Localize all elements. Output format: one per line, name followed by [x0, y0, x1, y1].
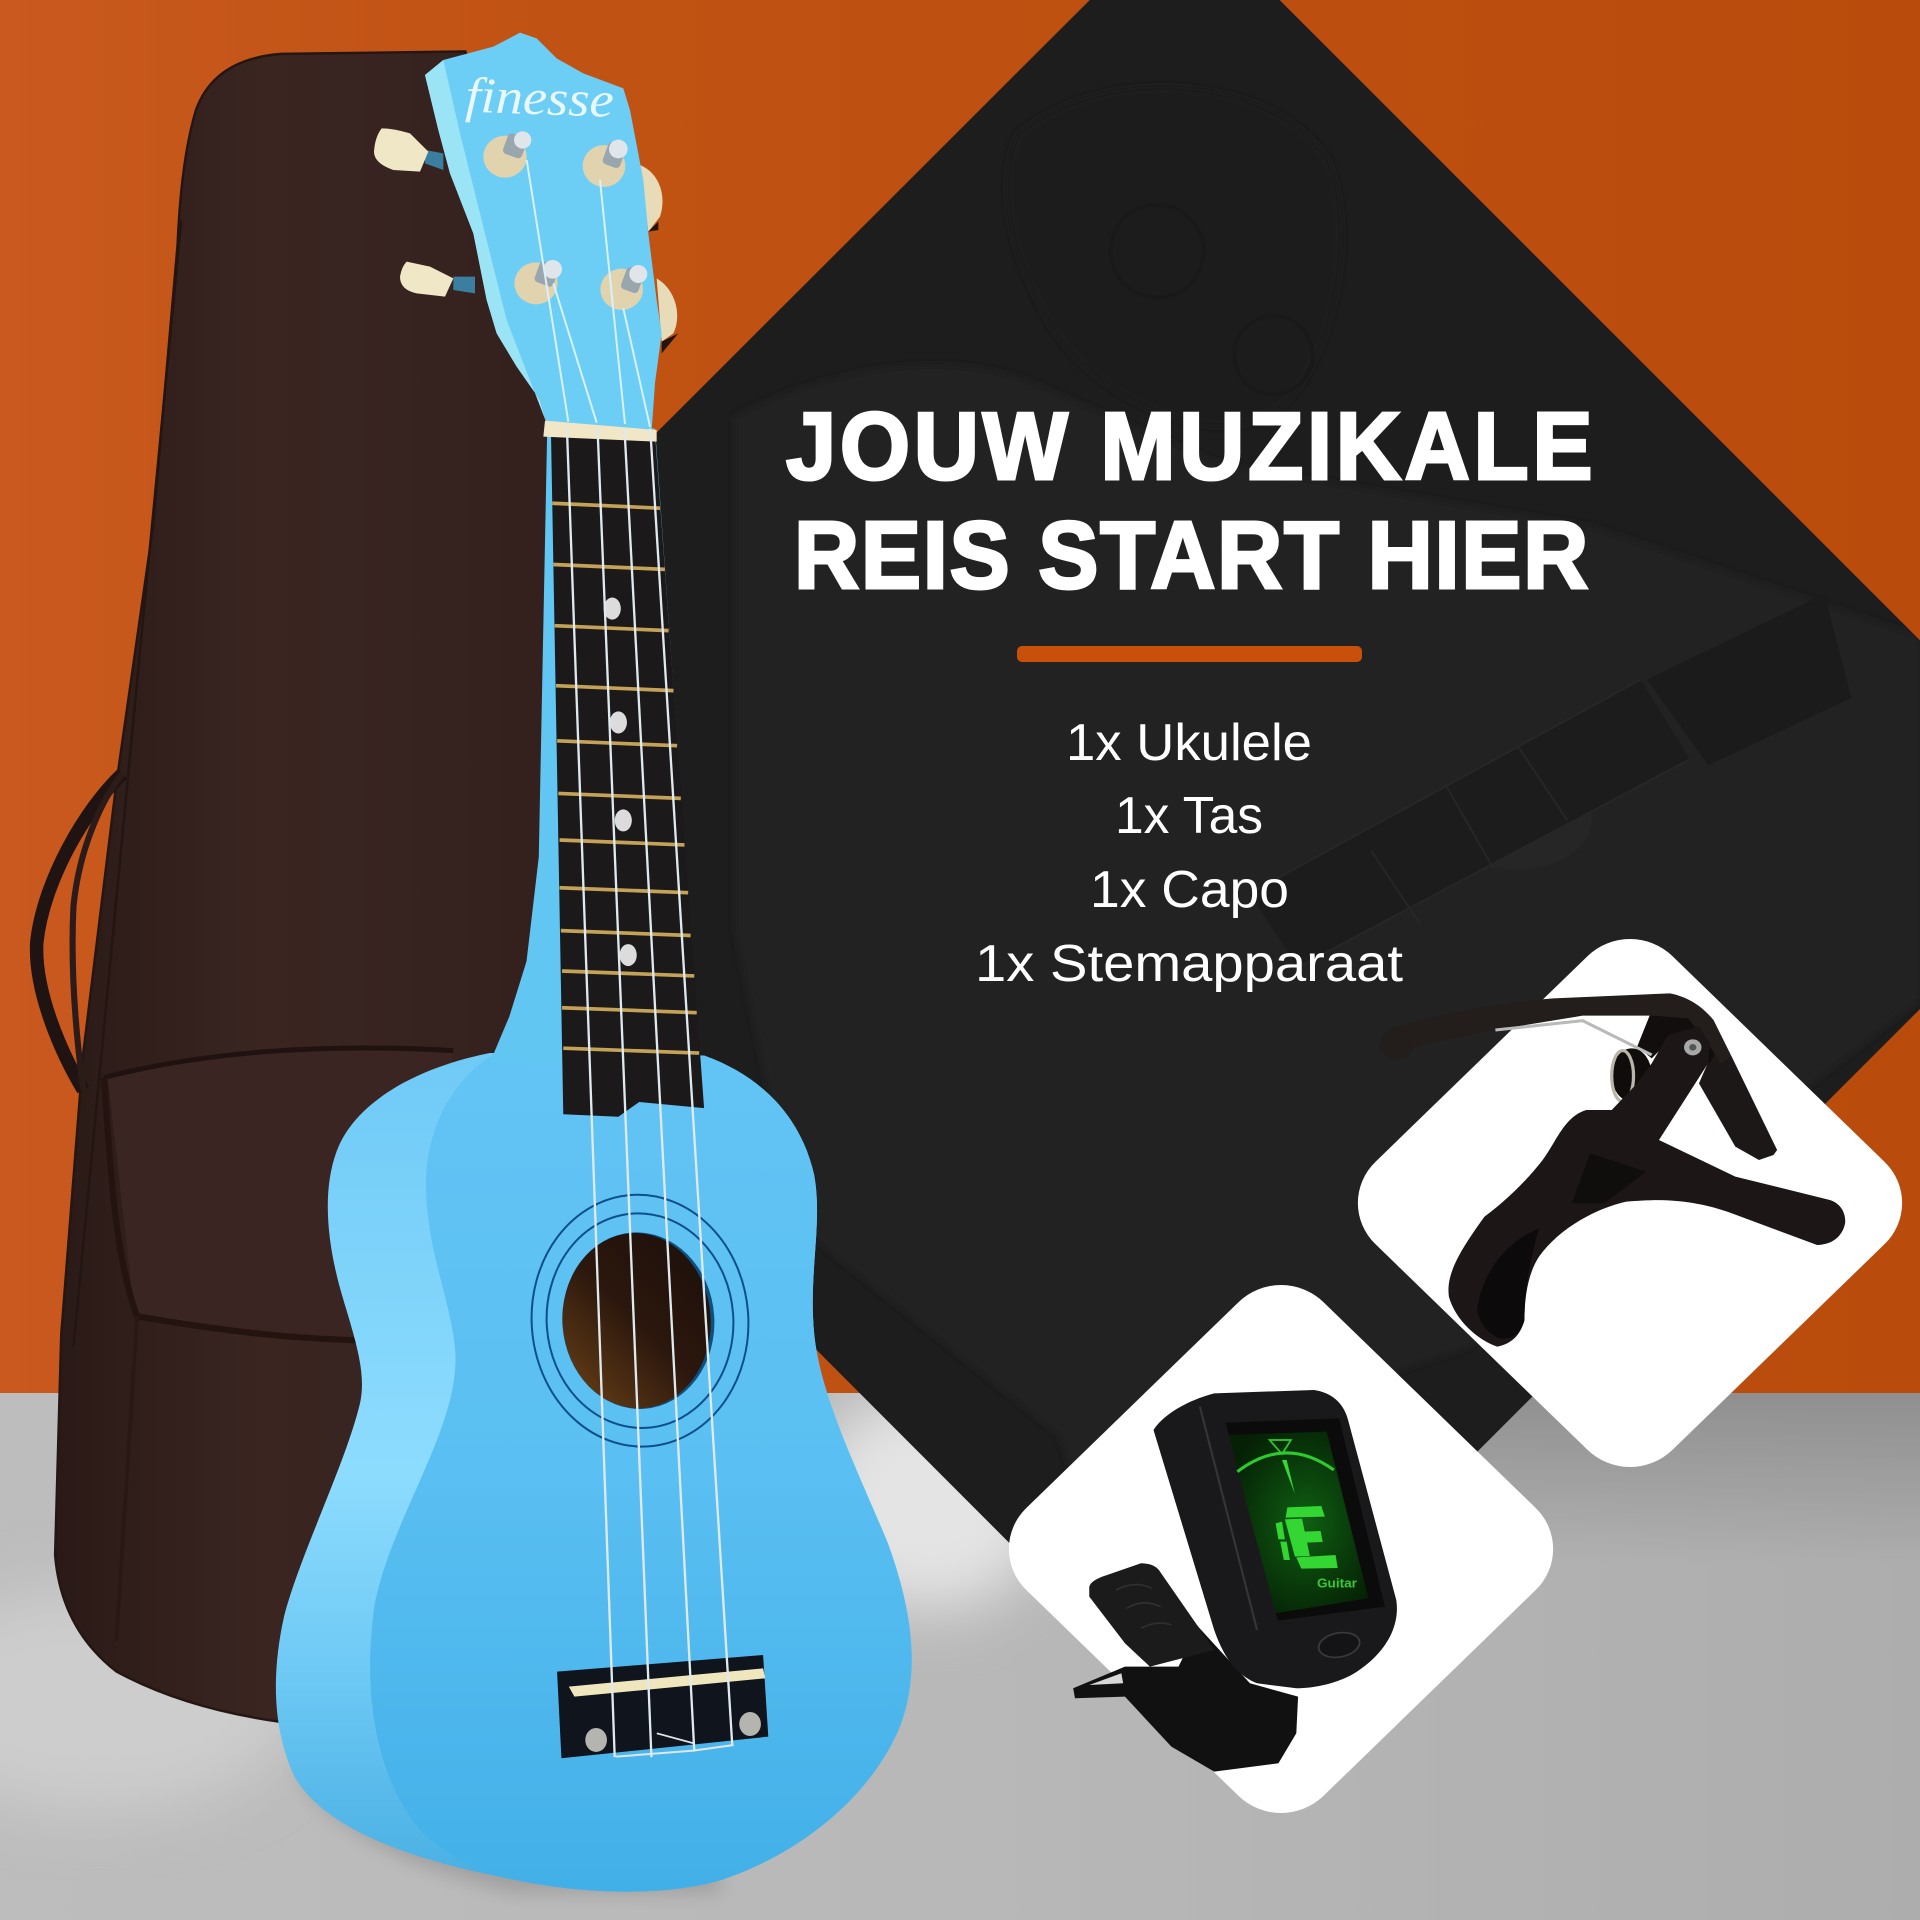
contents list: 1x Ukulele: [1066, 714, 1312, 772]
illustration: brown gig bag: [37, 51, 576, 1722]
title: JOUW MUZIKALE: [786, 392, 1593, 500]
brand logo: finesse: [465, 67, 615, 128]
sound hole with rosette: [523, 1187, 757, 1454]
title: [786, 392, 1593, 609]
ukulele neck: [490, 422, 700, 1071]
title: REIS START HIER: [794, 501, 1588, 609]
icon: clip-on tuner: [1073, 1390, 1397, 1772]
ukulele body side: [276, 1053, 912, 1892]
panel: tuner card: [984, 1261, 1578, 1837]
panel: dark diamond with ghost photo: [656, 0, 1920, 1543]
contents list: [975, 714, 1404, 993]
contents list: 1x Tas: [1115, 787, 1263, 845]
bridge: [557, 1655, 768, 1758]
icon: capo: [1379, 993, 1845, 1347]
illustration: ukulele: [276, 33, 912, 1892]
contents list: 1x Capo: [1090, 861, 1289, 919]
strings: [567, 429, 732, 1757]
ukulele body front: [370, 1053, 912, 1892]
background: orange wall: [0, 0, 1920, 1394]
tuner display label: Guitar: [1317, 1576, 1357, 1590]
fretboard: [551, 435, 704, 1117]
divider bar: [1017, 646, 1362, 662]
panel: capo card: [1333, 915, 1920, 1491]
contents list: 1x Stemapparaat: [975, 935, 1404, 993]
headstock: [374, 33, 678, 442]
background: grey floor: [0, 1390, 1920, 1920]
